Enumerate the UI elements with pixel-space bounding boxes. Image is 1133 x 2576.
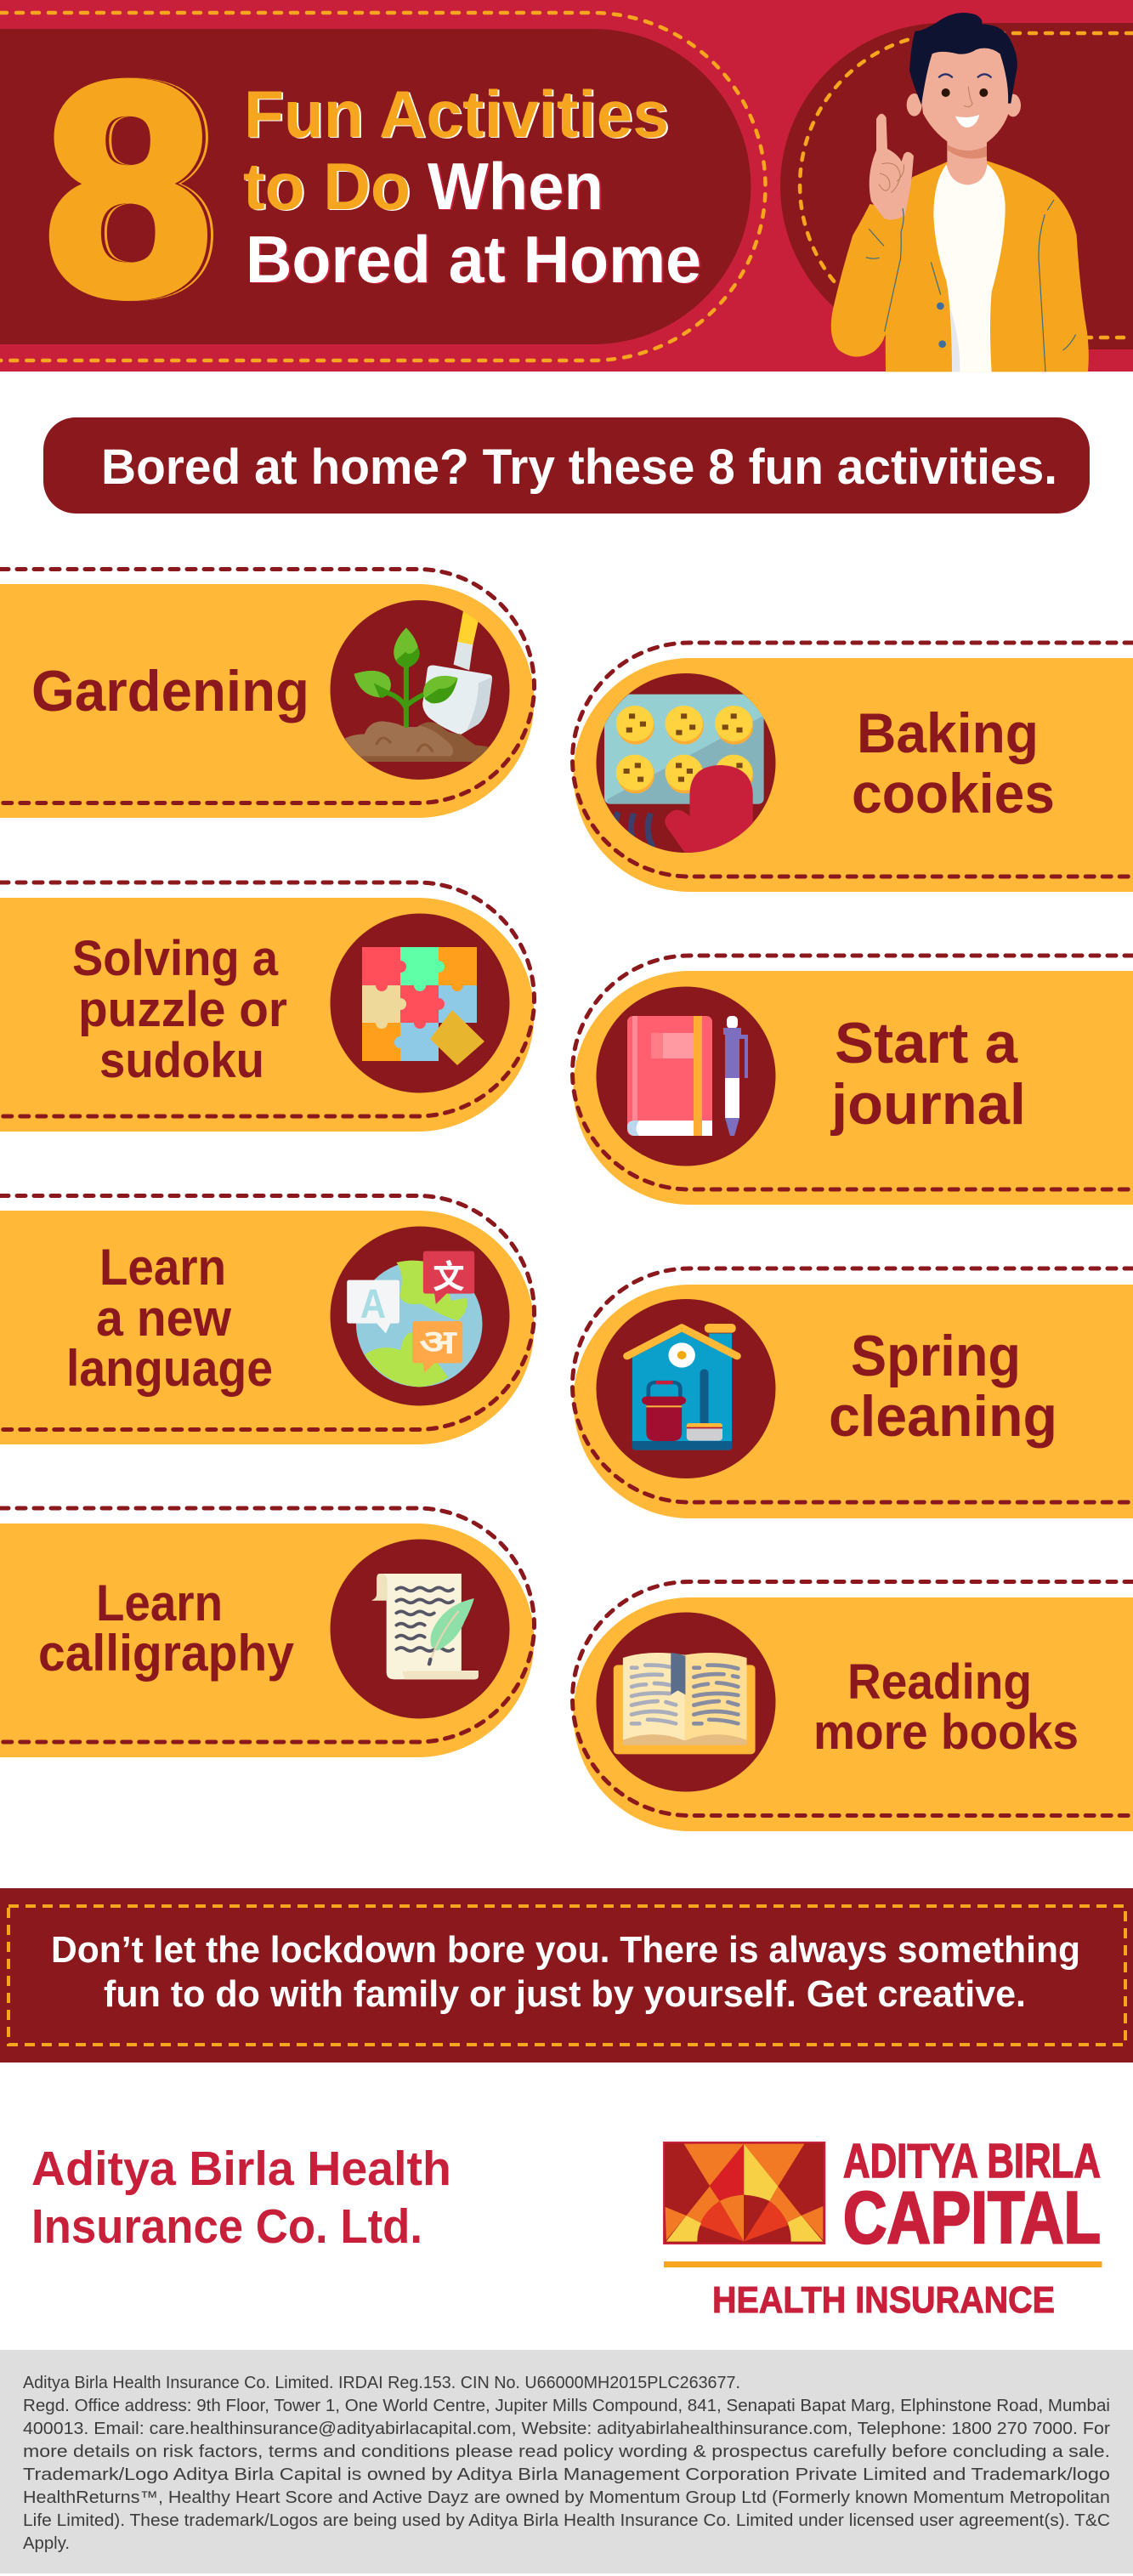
activity: baking cookies — [573, 643, 1133, 892]
label: journal — [830, 1072, 1026, 1137]
legal disclaimer footer: Apply. — [23, 2534, 70, 2553]
closing message banner — [0, 1888, 1133, 2063]
label: Solving a — [72, 931, 279, 986]
legal disclaimer footer: HealthReturns™, Healthy Heart Score and Active Dayz are owned by Momentum Group Ltd (Formerly known Momentum Metropolitan — [23, 2488, 1110, 2507]
closing message banner: fun to do with family or just by yourself. Get creative. — [104, 1973, 1026, 2015]
icon: cookie tray and oven mitt — [604, 695, 764, 861]
label: Spring — [851, 1324, 1021, 1388]
icon: globe with speech bubbles — [347, 1251, 482, 1387]
label: Learn — [99, 1239, 226, 1296]
title text: to Do — [243, 149, 411, 224]
icon: notebook and pen — [627, 1016, 748, 1136]
icon: house with bucket and mop — [627, 1324, 737, 1450]
legal disclaimer footer: Aditya Birla Health Insurance Co. Limited. IRDAI Reg.153. CIN No. U66000MH2015PLC263677. — [23, 2374, 740, 2392]
logo: Aditya Birla Capital Health Insurance — [664, 2134, 1102, 2321]
legal disclaimer footer: more details on risk factors, terms and conditions please read policy wording & prospectus carefully before concluding a sale. — [23, 2443, 1110, 2461]
legal disclaimer footer: 400013. Email: care.healthinsurance@adityabirlacapital.com, Website: adityabirlahealthinsurance.com, Telephone: 1800 270 7000. For — [23, 2420, 1110, 2438]
label: Reading — [847, 1654, 1032, 1710]
label — [72, 931, 287, 1088]
label: calligraphy — [38, 1625, 295, 1682]
title text: Bored at Home — [246, 222, 701, 297]
label: puzzle or — [78, 982, 287, 1037]
label: Start a — [835, 1011, 1018, 1075]
label — [829, 1324, 1057, 1449]
activity: reading more books — [573, 1581, 1133, 1831]
activity: learn calligraphy — [0, 1508, 534, 1757]
title text — [243, 77, 701, 297]
legal disclaimer footer: Trademark/Logo Aditya Birla Capital is owned by Aditya Birla Management Corporation Private Limited and Trademark/logo — [23, 2465, 1110, 2484]
illustration: man pointing up — [831, 13, 1089, 372]
icon: globe with speech bubbles: 文 — [433, 1259, 465, 1296]
label: more books — [813, 1705, 1079, 1760]
title text: When — [428, 149, 603, 224]
activity: start a journal — [573, 956, 1133, 1205]
icon: globe with speech bubbles: अ — [419, 1325, 457, 1360]
label — [830, 1011, 1026, 1137]
presenter panel — [780, 23, 1133, 349]
subtitle banner — [43, 417, 1090, 513]
legal disclaimer footer — [0, 2350, 1133, 2573]
icon: globe with speech bubbles: A — [360, 1281, 386, 1327]
label: language — [66, 1340, 273, 1397]
icon: open book — [614, 1653, 756, 1754]
logo mark — [664, 2142, 824, 2244]
title text: Fun Activities — [244, 77, 669, 151]
company name: Insurance Co. Ltd. — [31, 2199, 422, 2254]
label — [852, 701, 1055, 825]
activity: solving a puzzle or sudoku — [0, 882, 534, 1132]
big number 8: 8 — [44, 21, 212, 358]
logo: Aditya Birla Capital Health Insurance: HEALTH INSURANCE — [712, 2279, 1055, 2321]
legal disclaimer footer: Life Limited). These trademark/Logos are being used by Aditya Birla Health Insurance Co. Limited under licensed user agreement(s). T&C — [23, 2511, 1110, 2530]
activity: learn a new language — [0, 1195, 534, 1444]
title panel — [0, 29, 751, 344]
label: cleaning — [829, 1384, 1057, 1449]
label: Gardening — [31, 659, 309, 723]
label: Learn — [96, 1575, 223, 1631]
closing message banner: Don’t let the lockdown bore you. There is always something — [51, 1929, 1080, 1971]
activity: spring cleaning — [573, 1268, 1133, 1518]
label: Baking — [857, 701, 1039, 764]
header banner — [0, 0, 1133, 372]
label: sudoku — [99, 1033, 264, 1088]
icon: scroll and quill — [371, 1574, 479, 1679]
label: cookies — [852, 762, 1055, 825]
activity: gardening — [0, 570, 534, 818]
icon: jigsaw puzzle — [362, 947, 484, 1065]
company name — [31, 2142, 451, 2254]
label: a new — [96, 1290, 231, 1347]
label — [66, 1239, 273, 1397]
label — [813, 1654, 1079, 1760]
subtitle banner: Bored at home? Try these 8 fun activities. — [101, 440, 1057, 495]
icon: plant and shovel — [345, 610, 496, 762]
legal disclaimer footer: Regd. Office address: 9th Floor, Tower 1, One World Centre, Jupiter Mills Compound, 841, Senapati Bapat Marg, Elphinstone Road, Mumbai — [23, 2397, 1110, 2415]
label — [38, 1575, 295, 1682]
company name: Aditya Birla Health — [31, 2142, 451, 2196]
